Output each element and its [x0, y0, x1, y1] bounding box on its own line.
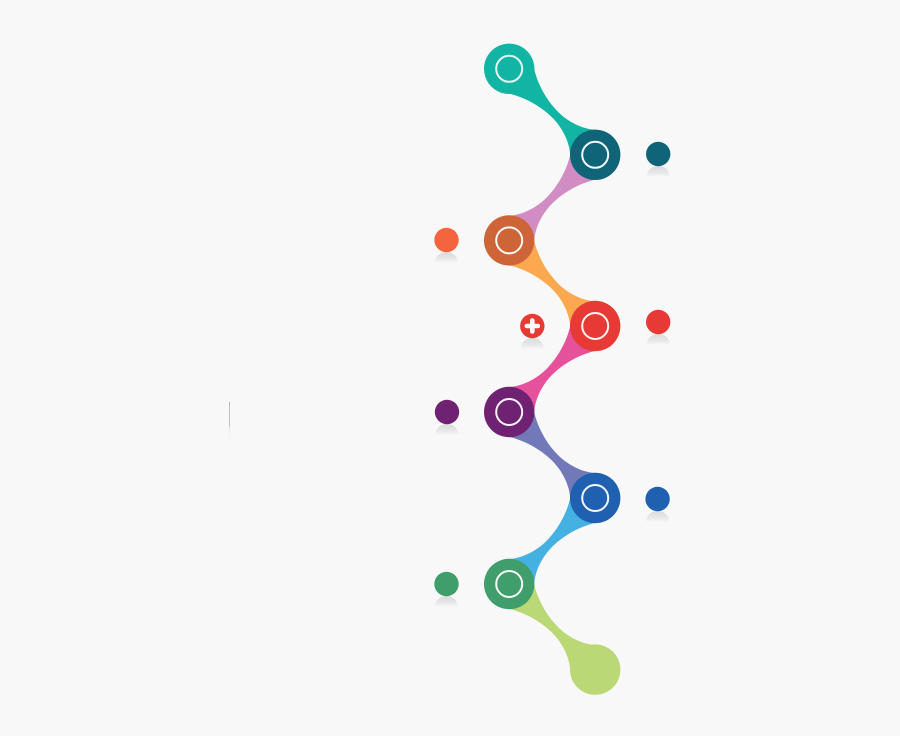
thin vertical line — [229, 402, 230, 440]
marker dot: red — [646, 310, 670, 345]
connector: orange — [509, 240, 595, 326]
node 5: purple — [484, 387, 534, 437]
connector: lime — [509, 584, 595, 670]
connector: magenta — [509, 326, 595, 412]
node 2: dark teal — [570, 130, 620, 180]
marker dot: purple — [435, 400, 459, 435]
marker dot: green — [434, 572, 459, 607]
connector: teal — [509, 69, 595, 155]
marker dot: blue — [645, 487, 670, 522]
connector: sky blue — [509, 498, 595, 584]
node 6: blue — [570, 473, 620, 523]
node 1: teal — [484, 44, 534, 94]
marker dot: dark teal — [646, 142, 670, 177]
node 7: green — [484, 559, 534, 609]
connector: pink — [509, 155, 595, 241]
marker dot: orange — [434, 228, 459, 263]
icon: plus button — [520, 314, 544, 349]
end node: lime — [570, 644, 620, 695]
connector: periwinkle — [509, 412, 595, 498]
node 4: red — [570, 301, 620, 351]
node 3: burnt orange — [484, 215, 534, 266]
